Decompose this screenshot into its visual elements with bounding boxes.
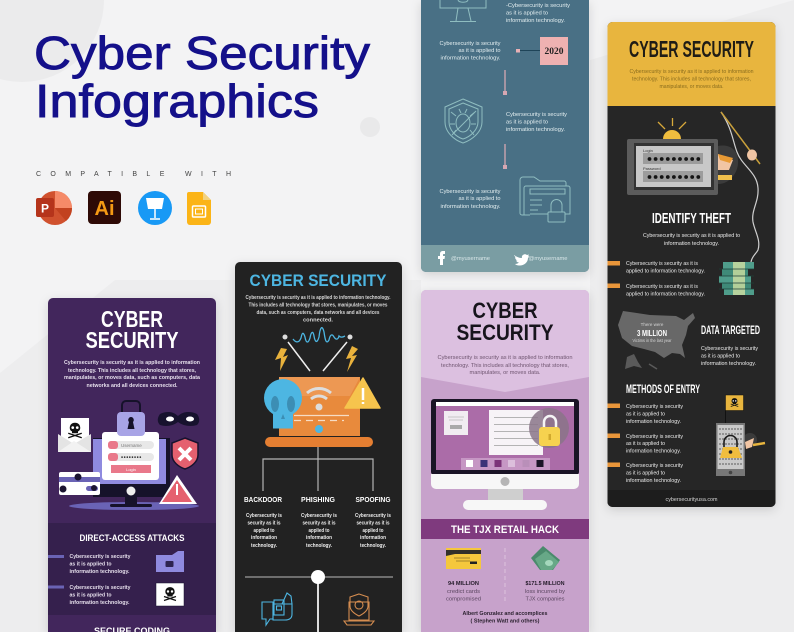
- icon: locked folder: [520, 177, 570, 222]
- heading: cyber security: CYBER: [101, 306, 163, 332]
- list: theft items: applied to information technology.: [626, 292, 705, 298]
- panel: yellow and dark infographic: [608, 22, 776, 507]
- icon: facebook: [438, 251, 445, 265]
- list: entry methods: Cybersecurity is security: [626, 463, 683, 469]
- stat: 171.5 million: $171.5 MILLION: [526, 581, 565, 587]
- column: phishing: [301, 497, 337, 549]
- text: identify theft body: Cybersecurity is security as it is applied to: [643, 233, 740, 239]
- text block 1: [506, 3, 570, 24]
- description text: manipulates, or moves data.: [470, 370, 541, 376]
- column: spoofing: Cybersecurity is: [355, 513, 391, 519]
- connector 2: [503, 144, 507, 169]
- text: data targeted body: [701, 346, 758, 367]
- description text: data, such as computers, data networks and all devices: [256, 310, 380, 316]
- column: backdoor: [244, 497, 282, 549]
- description text: [64, 360, 201, 389]
- column: phishing: applied to: [308, 528, 330, 534]
- description text: manipulates, or moves data.: [660, 84, 724, 90]
- illustration: login screen with alarm: Password: [643, 166, 661, 171]
- column: backdoor: applied to: [254, 528, 275, 534]
- text: data targeted body: information technology.: [701, 361, 756, 367]
- section: direct-access attacks: information technology.: [70, 569, 130, 575]
- text block 1: -Cybersecurity is security: [506, 3, 570, 9]
- footer band: @myusername: [528, 256, 568, 262]
- band: the tjx retail hack: [421, 519, 589, 539]
- credit note: ( Stephen Watt and others): [470, 618, 540, 624]
- tree connector: [263, 447, 373, 491]
- column: backdoor: BACKDOOR: [244, 497, 282, 504]
- map: united states: 3 MILLION: [637, 328, 667, 338]
- section: direct-access attacks: DIRECT-ACCESS ATTACKS: [80, 533, 184, 543]
- list: theft items: Cybersecurity is security as it is: [626, 261, 698, 267]
- heading: data targeted: DATA TARGETED: [701, 325, 760, 337]
- list: entry methods: as it is applied to: [626, 412, 665, 418]
- text block 3: as it is applied to: [506, 120, 548, 126]
- section: direct-access attacks: Cybersecurity is security: [70, 554, 131, 560]
- map: united states: Victims in the last year: [632, 338, 672, 343]
- stat: 171.5 million: TJX companies: [526, 596, 565, 602]
- text block 4: Cybersecurity is security: [440, 189, 501, 195]
- list: theft items: [608, 261, 705, 298]
- heading: cyber security: SECURITY: [86, 327, 178, 353]
- title: Cyber Security: [34, 27, 370, 79]
- text: identify theft body: information technology.: [664, 241, 719, 247]
- list: entry methods: Cybersecurity is security: [626, 404, 683, 410]
- column: backdoor: technology.: [251, 543, 277, 549]
- column: backdoor: security as it is: [248, 520, 281, 526]
- description text: networks and all devices connected.: [86, 383, 178, 389]
- list: entry methods: [608, 404, 683, 484]
- icon: powerpoint: [36, 191, 72, 225]
- illustration: signal wave and bolts: [275, 328, 358, 372]
- description text: technology. This includes all technology that stores,: [632, 76, 751, 82]
- heading: cyber security: CYBER SECURITY: [250, 271, 387, 290]
- dashed divider: [504, 548, 506, 602]
- footer band: [421, 245, 589, 272]
- stat: 94 million: credict cards: [447, 589, 480, 595]
- text block 3: [506, 112, 567, 133]
- description text: [630, 69, 754, 90]
- list: entry methods: information technology.: [626, 419, 681, 425]
- text block 2: as it is applied to: [458, 48, 500, 54]
- text block 1: as it is applied to: [506, 10, 548, 16]
- section: direct-access attacks: as it is applied to: [70, 562, 112, 568]
- description text: This includes all technology that stores, manipulates, or moves: [248, 302, 388, 308]
- icon: google slides: [187, 192, 211, 225]
- title: [34, 27, 370, 127]
- icon: bug shield: [445, 99, 482, 143]
- column: phishing: information: [306, 535, 332, 541]
- text block 2: Cybersecurity is security: [440, 41, 501, 47]
- icon: keynote: [138, 191, 172, 225]
- heading: cyber security: CYBER: [472, 298, 538, 323]
- icon: illustrator: [88, 191, 121, 224]
- section: direct-access attacks: Cybersecurity is security: [70, 585, 131, 591]
- illustration: computer login: ••••••••: [121, 456, 142, 462]
- list: entry methods: as it is applied to: [626, 441, 665, 447]
- icon: cash: [531, 546, 560, 570]
- column: spoofing: technology.: [360, 543, 386, 549]
- illustration: laptop with skull and warning: [264, 377, 380, 447]
- panel: purple infographic: [48, 298, 216, 632]
- text block 4: information technology.: [440, 204, 501, 210]
- illustration: computer login: Username: [121, 443, 142, 448]
- text: identify theft body: [643, 233, 740, 247]
- section: direct-access attacks: information technology.: [70, 600, 130, 606]
- map: united states: There were: [641, 322, 664, 327]
- illustration: desktop computer: [431, 399, 579, 510]
- footer: website: [608, 490, 776, 507]
- icon: shield: [172, 438, 198, 469]
- column: backdoor: Cybersecurity is: [246, 513, 282, 519]
- illustration: computer login: [69, 401, 199, 510]
- illustration: login screen with alarm: Login: [643, 148, 653, 153]
- description text: Cybersecurity is security as it is applied to information: [64, 360, 200, 366]
- text block 4: [440, 189, 501, 210]
- description text: [438, 355, 572, 376]
- heading: cyber security: SECURITY: [456, 320, 554, 345]
- heading: identify theft: IDENTIFY THEFT: [652, 210, 731, 227]
- column: phishing: technology.: [306, 543, 332, 549]
- year marker 2020: 2020: [544, 47, 564, 57]
- text: data targeted body: as it is applied to: [701, 354, 740, 360]
- stat: 171.5 million: loss incurred by: [525, 589, 565, 595]
- illustration: login screen with alarm: [627, 118, 718, 195]
- text block 3: information technology.: [506, 127, 565, 133]
- column: phishing: PHISHING: [301, 497, 336, 504]
- icon: poison envelope: [58, 418, 91, 452]
- description text: technology. This includes all technology that stores,: [441, 363, 569, 369]
- icon: social lock: [262, 593, 292, 625]
- column: spoofing: applied to: [362, 528, 384, 534]
- list: theft items: Cybersecurity is security as it is: [626, 284, 698, 290]
- icon: twitter: [514, 254, 530, 266]
- stat: 94 million: 94 MILLION: [448, 581, 479, 587]
- footer band: @myusername: [451, 256, 490, 262]
- text block 1: information technology.: [506, 18, 565, 24]
- icon: shield laptop: [344, 594, 374, 625]
- connector 1: [503, 70, 507, 95]
- section: direct-access attacks: [48, 523, 216, 615]
- text block 2: [440, 41, 501, 62]
- list: theft items: applied to information technology.: [626, 268, 705, 274]
- stat: 171.5 million: [525, 581, 565, 602]
- description text: Cybersecurity is security as it is applied to information technology.: [246, 295, 391, 301]
- list: entry methods: as it is applied to: [626, 470, 665, 476]
- panel: pink infographic: [421, 290, 589, 632]
- heading: cyber security: [86, 306, 178, 353]
- title: Infographics: [35, 75, 319, 127]
- heading: cyber security: [456, 298, 554, 345]
- timeline node: [245, 570, 393, 632]
- description text: Cybersecurity is security as it is applied to information: [438, 355, 572, 361]
- icon: credit card: [446, 548, 481, 569]
- text block 4: as it is applied to: [458, 196, 500, 202]
- footer: website: cybersecurityusa.com: [666, 497, 718, 503]
- icon: monitor outline: [440, 0, 486, 22]
- list: entry methods: information technology.: [626, 478, 681, 484]
- heading: methods of entry: METHODS OF ENTRY: [626, 384, 700, 396]
- icon: illustrator: Ai: [94, 198, 114, 220]
- column: phishing: Cybersecurity is: [301, 513, 337, 519]
- column: spoofing: [355, 497, 391, 549]
- panel: blue infographic: [421, 0, 589, 272]
- year marker 2020: [516, 37, 568, 65]
- icon: money stacks: [719, 262, 754, 295]
- credit note: Albert Gonzalez and accomplices: [462, 611, 548, 617]
- column: backdoor: information: [251, 535, 277, 541]
- credit note: [462, 611, 548, 624]
- column: spoofing: SPOOFING: [356, 497, 391, 504]
- list: entry methods: information technology.: [626, 448, 681, 454]
- map: united states: [618, 311, 695, 369]
- illustration: hacker fishing: [718, 112, 760, 262]
- illustration: phone with lock and flag: [716, 395, 765, 476]
- text block 2: information technology.: [440, 56, 501, 62]
- column: spoofing: security as it is: [356, 520, 390, 526]
- description text: manipulates, or moves data, such as computers, data: [64, 375, 201, 381]
- icon: hacker mask: [158, 412, 199, 426]
- description text: connected.: [303, 318, 333, 324]
- panel: black infographic: [235, 262, 402, 632]
- description text: technology. This includes all technology that stores,: [68, 368, 196, 374]
- section: direct-access attacks: as it is applied to: [70, 592, 112, 598]
- icon: infected card: [59, 472, 100, 495]
- illustration: computer login: Login: [126, 467, 136, 472]
- icon: powerpoint: P: [41, 202, 49, 216]
- band: the tjx retail hack: THE TJX RETAIL HACK: [451, 524, 559, 536]
- stat: 94 million: [446, 581, 481, 602]
- list: entry methods: Cybersecurity is security: [626, 434, 683, 440]
- stat: 94 million: compromised: [446, 596, 481, 602]
- description text: [246, 295, 391, 324]
- icon: warning triangle: [159, 475, 197, 504]
- column: spoofing: information: [360, 535, 386, 541]
- column: phishing: security as it is: [302, 520, 336, 526]
- text: data targeted body: Cybersecurity is security: [701, 346, 758, 352]
- description text: Cybersecurity is security as it is applied to information: [630, 69, 754, 75]
- text block 3: Cybersecurity is security: [506, 112, 567, 118]
- compatible with label: COMPATIBLE WITH: [36, 171, 231, 178]
